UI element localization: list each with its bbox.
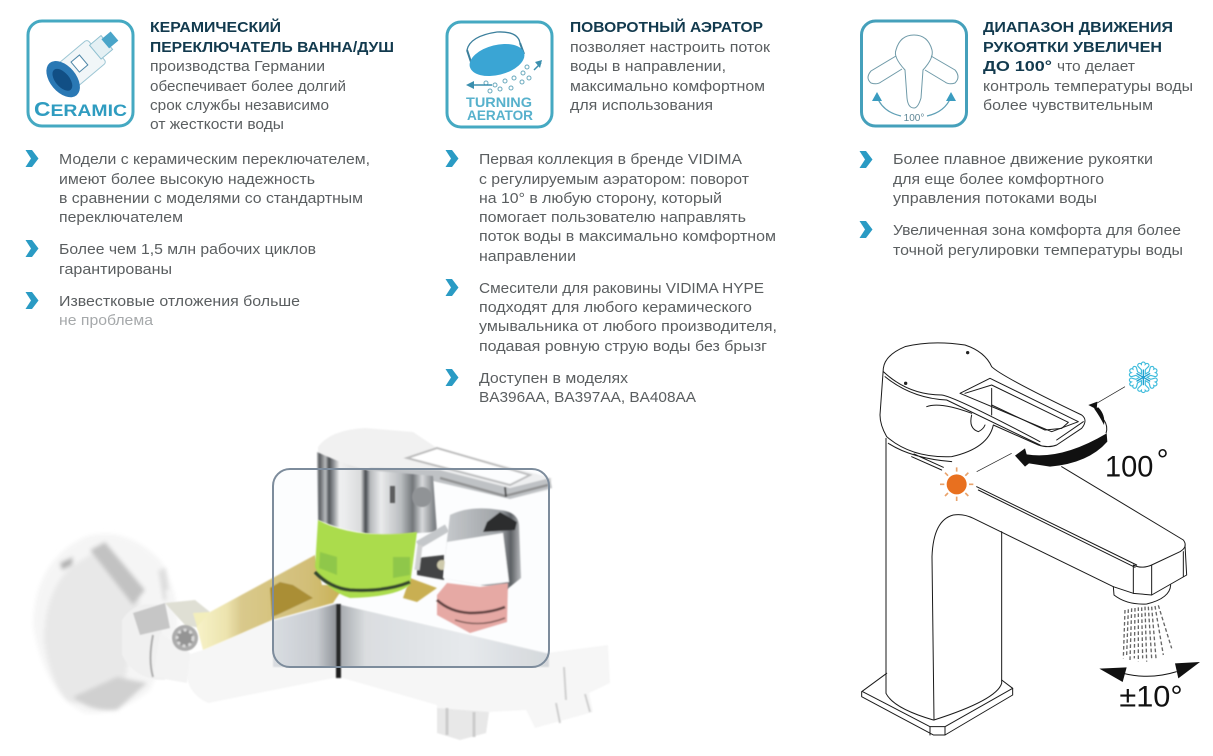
bullet 2: подходят для любого керамического <box>479 299 752 316</box>
lower body shading inside frame <box>273 604 549 678</box>
bullet 1: для еще более комфортного <box>893 171 1104 188</box>
bullet 2: Более чем 1,5 млн рабочих циклов <box>59 241 316 258</box>
icon: handle 100 degrees <box>862 21 966 126</box>
bullet 2: умывальника от любого производителя, <box>479 318 777 335</box>
bullet 1 <box>446 150 776 265</box>
bullet 2: гарантированы <box>59 261 172 278</box>
bullet 1: с регулируемым аэратором: поворот <box>479 171 749 188</box>
label: plus minus 10 degrees: ±10° <box>1119 681 1183 714</box>
chrome cylinder <box>317 452 437 535</box>
label: 100 degrees: ° <box>1157 444 1169 477</box>
bullet 2: точной регулировки температуры воды <box>893 242 1183 259</box>
text: aerator intro: воды в направлении, <box>570 58 726 75</box>
wall plate <box>33 534 178 713</box>
bullet 3: BA396AA, BA397AA, BA408AA <box>479 389 696 406</box>
icon: handle 100 degrees: 100° <box>904 113 924 124</box>
text: ceramic intro: производства Германии <box>150 58 325 75</box>
text: ceramic intro <box>150 58 346 133</box>
panel: ceramic switch <box>26 18 394 329</box>
bullet 2: Увеличенная зона комфорта для более <box>893 222 1181 239</box>
text: aerator intro: для использования <box>570 97 713 114</box>
bullet 2 <box>860 221 1183 259</box>
icon: hot sun <box>940 467 973 501</box>
text: aerator intro: позволяет настроить поток <box>570 39 770 56</box>
spout body <box>187 603 610 740</box>
illustration: basin faucet line drawing <box>862 343 1200 735</box>
pink cartridge <box>437 583 508 633</box>
panel: handle range <box>860 19 1193 259</box>
bullet 1: помогает пользователю направлять <box>479 209 746 226</box>
bullet 3: не проблема <box>59 312 154 329</box>
heading: handle range: РУКОЯТКИ УВЕЛИЧЕН <box>983 39 1162 56</box>
faucet outline <box>862 343 1187 735</box>
text: ceramic intro: срок службы независимо <box>150 97 329 114</box>
text: aerator intro <box>570 39 770 114</box>
heading: ceramic switch: КЕРАМИЧЕСКИЙ <box>150 18 281 36</box>
text: ceramic intro: от жесткости воды <box>150 116 284 133</box>
label: 100 degrees: 100 <box>1105 451 1153 484</box>
bullet 1: управления потоками воды <box>893 190 1097 207</box>
highlight frame <box>273 469 549 667</box>
label: 100 degrees <box>1105 444 1169 484</box>
icon: turning aerator: AERATOR <box>467 107 533 123</box>
text: handle intro <box>983 58 1193 114</box>
bullet 1 <box>26 150 370 226</box>
text: handle intro: контроль температуры воды <box>983 78 1193 95</box>
brass inner body <box>197 555 437 650</box>
heading: turning aerator: ПОВОРОТНЫЙ АЭРАТОР <box>570 18 763 36</box>
lever pivot details <box>390 486 447 580</box>
icon: ceramic cartridge <box>28 20 133 126</box>
lever handle <box>318 428 552 499</box>
bullet 1: поток воды в максимально комфортном <box>479 228 776 245</box>
bullet 1: имеют более высокую надежность <box>59 171 315 188</box>
bullet 2: подавая ровную струю воды без брызг <box>479 338 768 355</box>
bullet 1: Первая коллекция в бренде VIDIMA <box>479 151 742 168</box>
bullet 3 <box>446 369 696 406</box>
arrow: plus minus 10 degrees <box>1099 662 1200 682</box>
bullet 1: направлении <box>479 248 576 265</box>
icon: turning aerator <box>447 22 552 127</box>
heading: ceramic switch <box>150 18 394 56</box>
bullet 2: Смесители для раковины VIDIMA HYPE <box>479 280 764 297</box>
bullet 3: Известковые отложения больше <box>59 293 300 310</box>
bullet 1: в сравнении с моделями со стандартным <box>59 190 363 207</box>
bullet 1: переключателем <box>59 209 183 226</box>
bullet 1: на 10° в любую сторону, который <box>479 190 722 207</box>
heading: handle range: ДИАПАЗОН ДВИЖЕНИЯ <box>983 19 1173 36</box>
bullet 2 <box>26 240 316 278</box>
heading: ceramic switch: ПЕРЕКЛЮЧАТЕЛЬ ВАННА/ДУШ <box>150 39 394 56</box>
bullet 3: Доступен в моделях <box>479 370 629 387</box>
bullet 1 <box>860 151 1153 207</box>
text: handle intro: что делает <box>1057 58 1135 75</box>
icon: turning aerator: TURNING <box>466 94 532 110</box>
text: handle intro: более чувствительным <box>983 97 1153 114</box>
water spray <box>1123 605 1172 662</box>
icon: ceramic cartridge: CERAMIC <box>34 99 127 121</box>
heading: handle range: ДО 100° <box>983 58 1052 75</box>
text: aerator intro: максимально комфортном <box>570 78 765 95</box>
bullet 1: Более плавное движение рукоятки <box>893 151 1153 168</box>
bullet 1: Модели с керамическим переключателем, <box>59 151 370 168</box>
text: ceramic intro: обеспечивает более долгий <box>150 78 346 95</box>
small chrome handle <box>443 508 521 590</box>
illustration: cutaway bath faucet <box>33 428 610 740</box>
panel: turning aerator <box>446 18 777 406</box>
arrow: 100 degree rotation <box>977 387 1125 472</box>
bullet 3 <box>26 292 300 329</box>
wall connector and nut <box>122 600 210 683</box>
bullet 2 <box>446 279 777 355</box>
icon: cold snowflake <box>1131 364 1155 391</box>
green cartridge <box>315 520 417 598</box>
heading: handle range <box>983 19 1173 75</box>
